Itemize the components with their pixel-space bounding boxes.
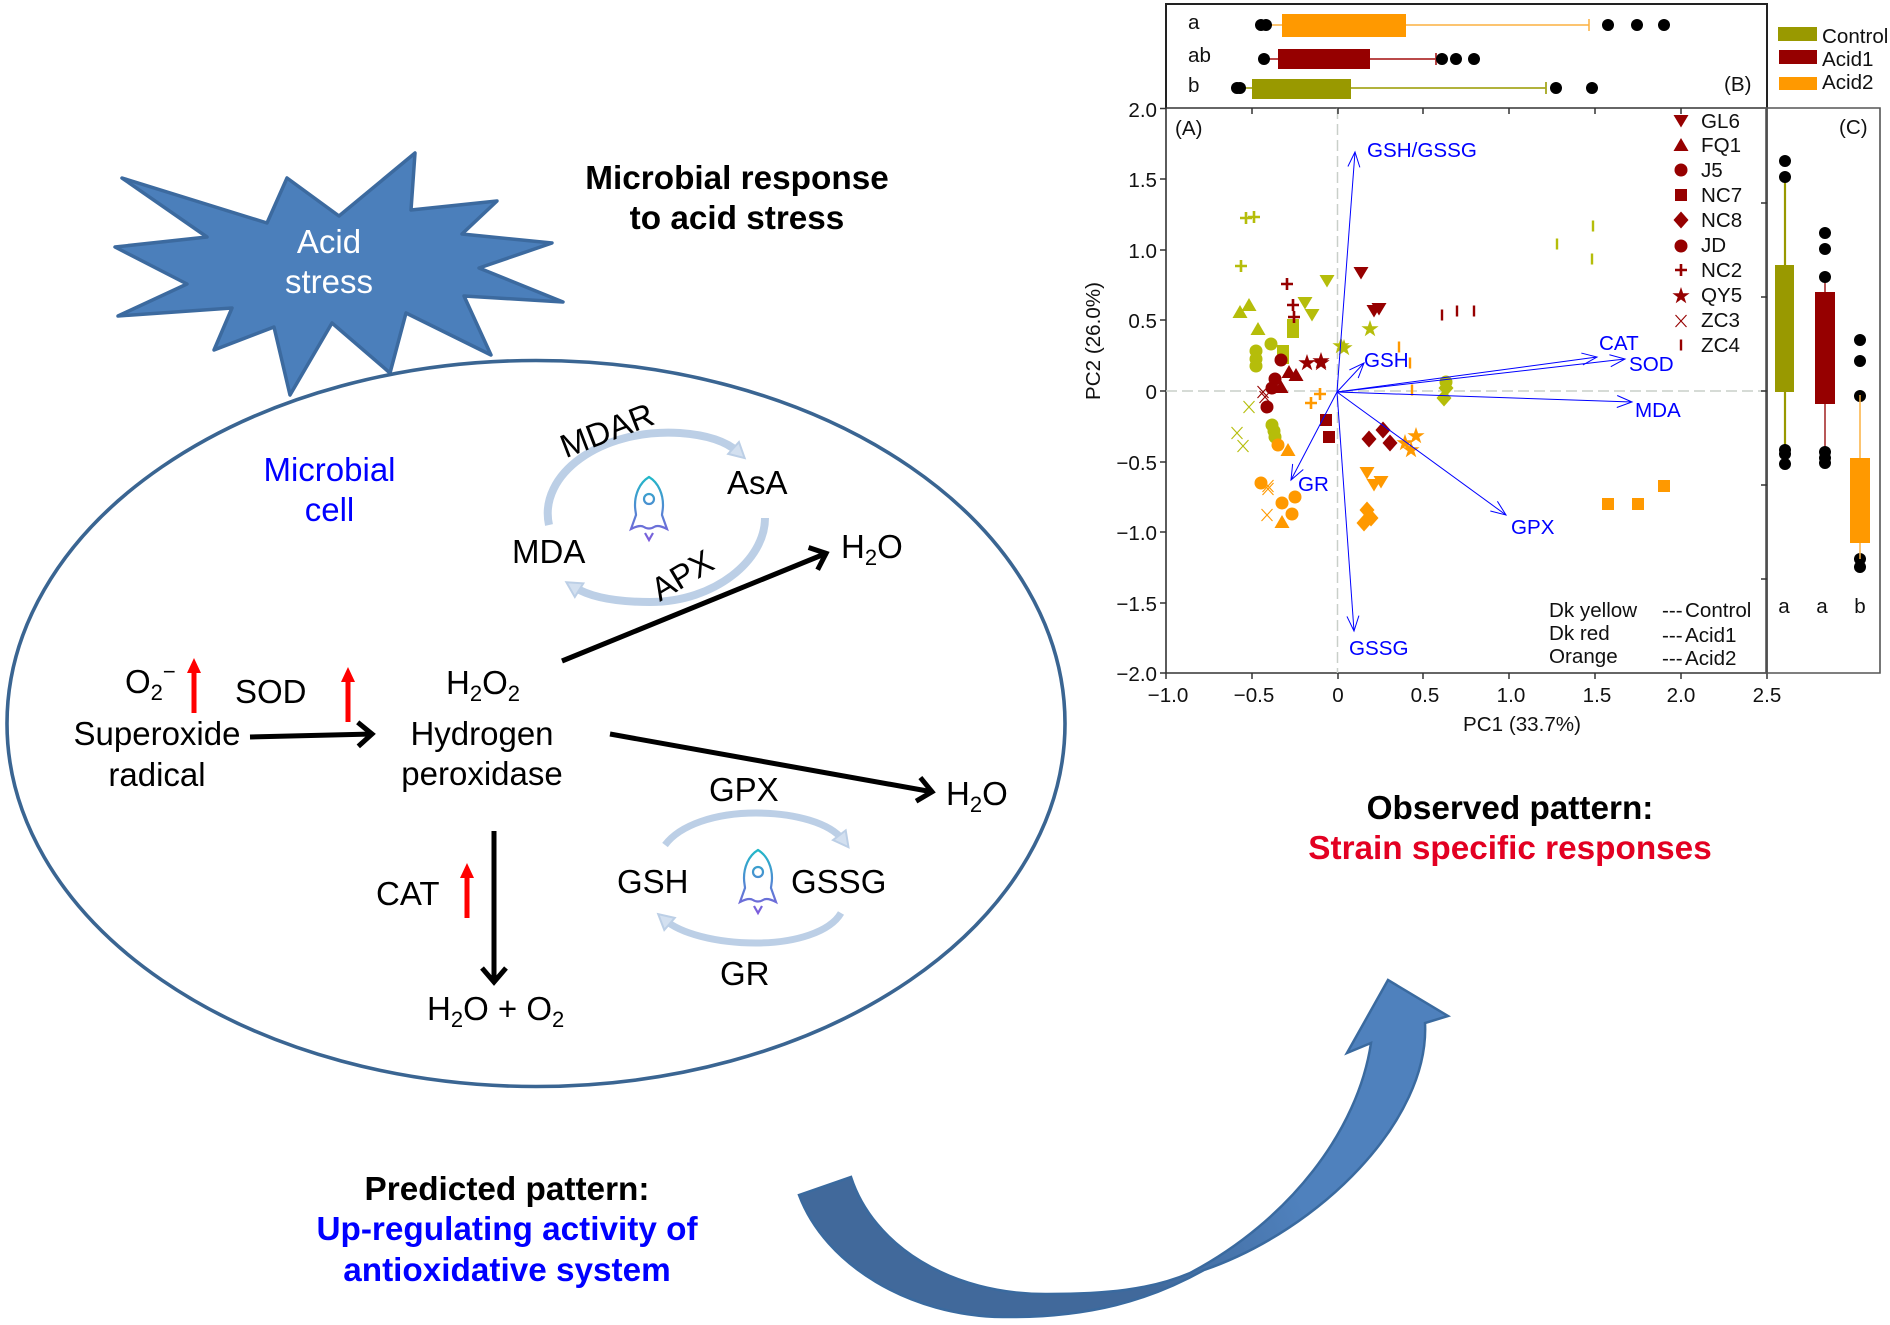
label: right H2O: H	[946, 775, 970, 812]
arrow to upper water	[562, 553, 827, 661]
strain legend	[1672, 110, 1742, 357]
glutathione cycle: GSH	[617, 863, 689, 900]
hydrogen peroxide group: Hydrogen	[410, 715, 554, 752]
y axis labels: 1.5	[1128, 169, 1157, 192]
vector labels: GR	[1298, 473, 1329, 496]
panel C: vertical boxplot: (C)	[1839, 116, 1868, 139]
superoxide group	[74, 659, 240, 793]
strain legend: ZC3	[1701, 309, 1740, 332]
strain legend: FQ1	[1701, 134, 1741, 157]
x axis title: PC1 (33.7%)	[1463, 713, 1581, 736]
y axis labels: 2.0	[1128, 99, 1157, 122]
observed pattern text: Observed pattern:	[1367, 790, 1653, 827]
hydrogen peroxide group: peroxidase	[401, 755, 563, 792]
y axis labels: −1.0	[1116, 522, 1157, 545]
panel B: horizontal boxplot: b	[1188, 74, 1199, 97]
label: right H2O: O	[982, 775, 1008, 812]
panel C: vertical boxplot: b	[1854, 595, 1866, 618]
heading: microbial response: Microbial response	[585, 160, 889, 197]
superoxide group: Superoxide	[74, 715, 240, 752]
panel B: horizontal boxplot: ab	[1188, 44, 1211, 67]
treatment colour key: Acid1	[1685, 624, 1737, 647]
ascorbate cycle: MDA	[512, 533, 585, 570]
predicted pattern text: antioxidative system	[343, 1252, 671, 1289]
y axis labels: 0.5	[1128, 310, 1157, 333]
treatment colour key: ---	[1662, 647, 1683, 670]
strain legend: NC2	[1701, 259, 1742, 282]
hydrogen peroxide group	[401, 664, 563, 792]
panel C: vertical boxplot: a	[1778, 595, 1790, 618]
group colour legend	[1778, 25, 1888, 94]
superoxide group: −	[163, 659, 176, 684]
panel B: horizontal boxplot: a	[1188, 11, 1200, 34]
x axis labels: −0.5	[1234, 684, 1274, 707]
ascorbate cycle	[512, 396, 788, 608]
strain legend: ZC4	[1701, 334, 1740, 357]
x axis labels: 1.0	[1497, 684, 1525, 707]
predicted pattern text: Up-regulating activity of	[316, 1211, 698, 1248]
vector labels: GPX	[1511, 516, 1555, 539]
starburst: acid stress: Acid	[297, 223, 361, 260]
treatment colour key: Control	[1685, 599, 1751, 622]
ascorbate cycle: APX	[644, 542, 720, 608]
arrow to right water	[610, 734, 933, 792]
arrow: superoxide to peroxide	[250, 734, 373, 737]
vector labels	[1298, 139, 1681, 660]
x axis labels: 0.5	[1411, 684, 1439, 707]
orange box	[1850, 334, 1870, 573]
hydrogen peroxide group: O	[482, 664, 508, 701]
x axis labels: 2.5	[1753, 684, 1781, 707]
arrow: peroxide to water and oxygen	[492, 831, 496, 983]
panel letter A: (A)	[1175, 117, 1202, 140]
predicted pattern text: Predicted pattern:	[365, 1171, 649, 1208]
acid2 points	[1254, 342, 1670, 532]
panel B: horizontal boxplot	[1166, 4, 1767, 108]
vector labels: GSH	[1364, 349, 1409, 372]
label: upper H2O: O	[877, 528, 903, 565]
group colour legend: Acid2	[1822, 71, 1874, 94]
panel A: PCA biplot	[1082, 99, 1781, 736]
label: water plus oxygen: H	[427, 990, 451, 1027]
orange box	[1255, 14, 1670, 37]
treatment colour key: Dk red	[1549, 622, 1610, 645]
starburst: acid stress: stress	[285, 263, 373, 300]
strain legend: QY5	[1701, 284, 1742, 307]
glutathione cycle	[617, 771, 886, 992]
strain legend: NC8	[1701, 209, 1742, 232]
treatment colour key: Acid2	[1685, 647, 1737, 670]
red arrow: superoxide up	[187, 658, 201, 713]
control points	[1232, 211, 1593, 452]
x axis labels	[1148, 684, 1781, 707]
observed pattern text	[1308, 790, 1712, 867]
glutathione cycle: GPX	[709, 771, 779, 808]
starburst: acid stress	[115, 153, 563, 395]
strain legend: NC7	[1701, 184, 1742, 207]
y axis labels	[1116, 99, 1157, 686]
label: microbial cell: cell	[305, 491, 354, 528]
hydrogen peroxide group: 2	[470, 681, 482, 706]
label: upper H2O: H	[841, 528, 865, 565]
treatment colour key	[1549, 599, 1751, 670]
group colour legend: Acid1	[1822, 48, 1874, 71]
plot frame and axes	[1160, 108, 1767, 679]
treatment colour key: ---	[1662, 624, 1683, 647]
ascorbate cycle: AsA	[727, 464, 788, 501]
y axis labels: 1.0	[1128, 240, 1157, 263]
big curved arrow	[799, 980, 1448, 1317]
label: microbial cell: Microbial	[263, 451, 396, 488]
hydrogen peroxide group: H	[446, 664, 470, 701]
red arrow: SOD up	[341, 667, 355, 722]
vector labels: GSH/GSSG	[1367, 139, 1477, 162]
vector labels: MDA	[1635, 399, 1681, 422]
ascorbate cycle: MDAR	[555, 396, 659, 465]
x axis labels: 0	[1332, 684, 1344, 707]
observed pattern text: Strain specific responses	[1308, 830, 1712, 867]
y axis title: PC2 (26.0%)	[1082, 282, 1105, 400]
dark red box	[1815, 227, 1835, 469]
strain legend: JD	[1701, 234, 1726, 257]
label: upper H2O: 2	[865, 545, 877, 570]
y axis labels: −2.0	[1116, 663, 1157, 686]
x axis labels: 1.5	[1583, 684, 1611, 707]
label: right H2O: 2	[970, 792, 982, 817]
loading vectors	[1291, 152, 1632, 631]
hydrogen peroxide group: 2	[508, 681, 520, 706]
panel B: horizontal boxplot: (B)	[1724, 73, 1751, 96]
y axis labels: −0.5	[1116, 452, 1157, 475]
vector labels: GSSG	[1349, 637, 1409, 660]
treatment colour key: Dk yellow	[1549, 599, 1637, 622]
dark red box	[1258, 49, 1480, 69]
red arrow: CAT up	[460, 863, 474, 918]
x axis labels: −1.0	[1148, 684, 1188, 707]
acid1 points	[1258, 267, 1474, 452]
olive box	[1231, 79, 1598, 99]
heading: microbial response: to acid stress	[630, 200, 844, 237]
group colour legend: Control	[1822, 25, 1888, 48]
y axis labels: 0	[1146, 381, 1157, 404]
vector labels: SOD	[1629, 353, 1674, 376]
olive box	[1775, 155, 1794, 470]
panel C: vertical boxplot	[1761, 108, 1880, 673]
label: water plus oxygen: O + O	[463, 990, 552, 1027]
label: CAT: CAT	[376, 875, 440, 912]
superoxide group: O	[125, 663, 151, 700]
strain legend: GL6	[1701, 110, 1740, 133]
label: water plus oxygen: 2	[552, 1007, 564, 1032]
glutathione cycle: GR	[720, 955, 770, 992]
glutathione cycle: GSSG	[791, 863, 886, 900]
treatment colour key: ---	[1662, 599, 1683, 622]
superoxide group: 2	[151, 680, 163, 705]
y axis labels: −1.5	[1116, 593, 1157, 616]
predicted pattern text	[316, 1171, 698, 1289]
label: SOD: SOD	[235, 673, 307, 710]
strain legend: J5	[1701, 159, 1723, 182]
vector labels: CAT	[1599, 332, 1639, 355]
microbial cell outline	[7, 360, 1065, 1086]
superoxide group: radical	[108, 756, 206, 793]
panel C: vertical boxplot: a	[1816, 595, 1828, 618]
x axis labels: 2.0	[1667, 684, 1695, 707]
treatment colour key: Orange	[1549, 645, 1618, 668]
label: water plus oxygen: 2	[451, 1007, 463, 1032]
